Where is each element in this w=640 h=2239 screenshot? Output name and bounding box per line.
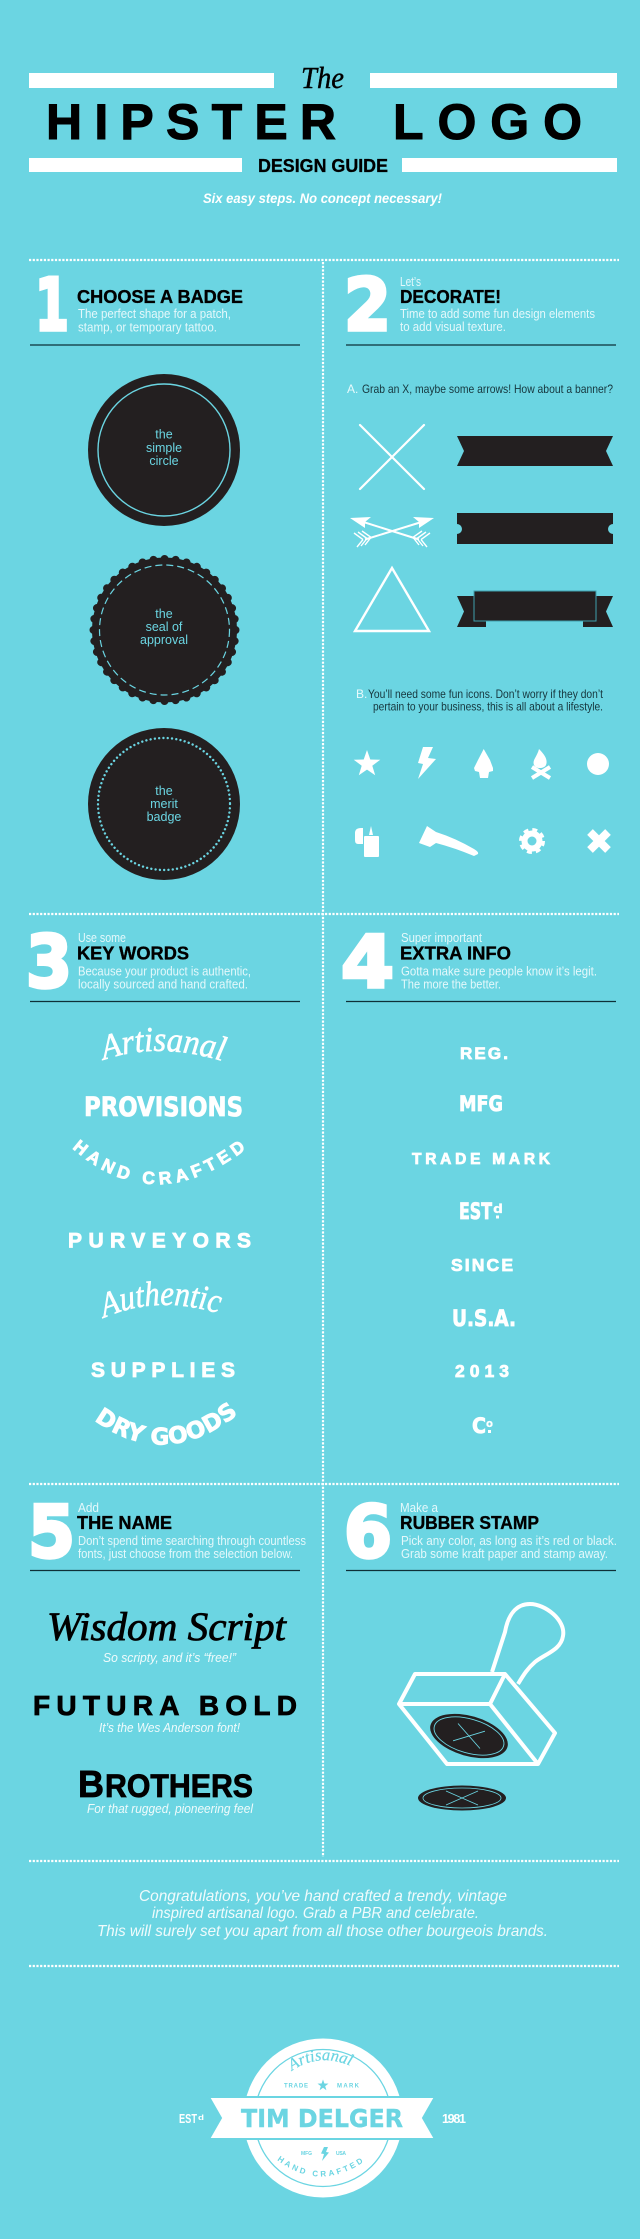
- step 4 description: [401, 964, 597, 992]
- logo circle: [244, 2038, 402, 2198]
- step 4 description: Gotta make sure people know it’s legit.: [401, 964, 597, 978]
- step 4 description: The more the better.: [401, 978, 501, 992]
- font sample: Brothers: [78, 1764, 253, 1806]
- step 2 heading: DECORATE!: [400, 287, 501, 307]
- step 3 description: Because your product is authentic,: [78, 964, 251, 978]
- title block: [29, 60, 617, 206]
- closing text: This will surely set you apart from all those other bourgeois brands.: [97, 1923, 548, 1940]
- logo: Artisanal: Artisanal: [290, 2051, 354, 2072]
- font sample: Futura Bold: FUTURA BOLD: [33, 1690, 297, 1721]
- keyword: Provisions: PROVISIONS: [84, 1092, 243, 1123]
- illustration: rubber stamp: [399, 1604, 563, 1810]
- title: The: The: [301, 60, 344, 95]
- icon: axe: [419, 826, 478, 856]
- icon: crossed arrows: [350, 517, 434, 547]
- step 6 description: Grab some kraft paper and stamp away.: [401, 1547, 608, 1561]
- instruction A: A.: [347, 382, 358, 396]
- info: USA: U.S.A.: [452, 1307, 516, 1332]
- info: Trade Mark: TRADE MARK: [412, 1151, 551, 1168]
- step number 3: 3: [26, 920, 72, 1004]
- logo: MFG USA: MFG: [301, 2151, 312, 2157]
- keyword: Authentic: Authentic: [102, 1281, 222, 1319]
- icon set: [354, 747, 609, 857]
- logo: Trade Mark: TRADE: [284, 2084, 308, 2090]
- icon: arrowhead: [474, 749, 493, 778]
- step 4 eyebrow: Super important: [401, 931, 482, 945]
- step 3 eyebrow: Use some: [78, 931, 126, 945]
- step number 1: 1: [35, 263, 69, 347]
- logo: MFG USA: [301, 2147, 346, 2161]
- caption: Futura Bold: It’s the Wes Anderson font!: [99, 1720, 240, 1735]
- step 1 heading: CHOOSE A BADGE: [77, 287, 243, 307]
- icon: gear: [520, 830, 544, 852]
- step number 4: 4: [341, 920, 394, 1004]
- instruction B: pertain to your business, this is all about a lifestyle.: [373, 700, 603, 714]
- step 6 heading: RUBBER STAMP: [400, 1513, 539, 1533]
- logo: Estd: d: [198, 2115, 204, 2122]
- tagline: Six easy steps. No concept necessary!: [203, 190, 442, 206]
- info: Since: SINCE: [451, 1255, 513, 1275]
- panel: step 3 key words: [26, 920, 300, 1446]
- step 5 heading: THE NAME: [77, 1513, 172, 1533]
- title bars: [29, 73, 617, 172]
- badge: seal of approval: approval: [140, 633, 188, 647]
- stamp face logo: [425, 1706, 513, 1766]
- logo: Tim Delger: TIM DELGER: [241, 2104, 403, 2133]
- step 1 description: [78, 307, 231, 334]
- badge: merit badge: [88, 728, 240, 880]
- step 2 eyebrow: Let’s: [400, 275, 421, 289]
- step 2 description: [400, 307, 595, 334]
- logo: Trade Mark: [284, 2080, 360, 2090]
- final logo: [179, 2038, 466, 2198]
- banner: folded ribbon: [457, 591, 613, 627]
- logo: 1981: 1981: [442, 2112, 466, 2126]
- instruction B: You’ll need some fun icons. Don’t worry if they don’t: [368, 687, 604, 701]
- panel: step 6 rubber stamp: [344, 1490, 617, 1810]
- keyword: Hand Crafted: HAND CRAFTED: [72, 1139, 244, 1185]
- icon: cross: [590, 832, 608, 850]
- stamp impression: [418, 1786, 506, 1810]
- info: Mfg: MFG: [459, 1092, 503, 1116]
- panel: step 4 extra info: [341, 920, 616, 1438]
- closing text: [97, 1888, 548, 1940]
- badge: simple circle: circle: [149, 454, 179, 468]
- badge: seal of approval: seal of: [146, 620, 183, 634]
- step 3 description: locally sourced and hand crafted.: [78, 978, 248, 992]
- step number 6: 6: [344, 1490, 392, 1574]
- keyword: Supplies: SUPPLIES: [91, 1359, 235, 1382]
- logo: Trade Mark: MARK: [337, 2084, 360, 2090]
- icon: star: [354, 750, 380, 775]
- step 6 description: Pick any color, as long as it’s red or black.: [401, 1534, 617, 1548]
- step 3 heading: KEY WORDS: [77, 944, 189, 964]
- info: Estd: EST: [459, 1200, 492, 1225]
- step 1 description: The perfect shape for a patch,: [78, 307, 231, 321]
- step 5 description: fonts, just choose from the selection below.: [78, 1547, 293, 1561]
- badge: simple circle: the: [155, 428, 173, 442]
- step 2 description: Time to add some fun design elements: [400, 307, 595, 321]
- icon: lightning bolt: [418, 747, 436, 779]
- icon: dot: [587, 753, 609, 775]
- logo: Hand Crafted: HAND CRAFTED: [278, 2156, 362, 2177]
- font sample: Brothers: ROTHERS: [105, 1768, 253, 1804]
- step 6 description: [401, 1534, 617, 1561]
- info: Reg.: REG.: [460, 1044, 508, 1063]
- panel: step 5 the name: [28, 1490, 306, 1816]
- logo: Estd: EST: [179, 2112, 197, 2126]
- step 5 description: [78, 1534, 306, 1561]
- icon: crossed lines: [360, 425, 424, 489]
- instruction B: [356, 687, 604, 714]
- badge: merit badge: merit: [150, 797, 178, 811]
- step 3 description: [78, 964, 251, 992]
- keyword: Dry Goods: DRY GOODS: [95, 1402, 236, 1446]
- keyword: Purveyors: PURVEYORS: [68, 1230, 251, 1252]
- step 2 description: to add visual texture.: [400, 320, 506, 334]
- icon: campfire: [532, 749, 550, 778]
- closing text: inspired artisanal logo. Grab a PBR and celebrate.: [152, 1905, 479, 1922]
- banner: swallowtail: [457, 436, 613, 466]
- logo banner: [209, 2097, 435, 2139]
- step 5 description: Don’t spend time searching through countless: [78, 1534, 306, 1548]
- title: Hipster Logo: LOGO: [393, 94, 582, 150]
- step number 2: 2: [344, 263, 391, 347]
- logo: MFG USA: USA: [336, 2151, 346, 2157]
- icon: triangle: [355, 568, 429, 631]
- icon: lighter: [355, 826, 379, 857]
- info: Estd: d: [493, 1202, 503, 1216]
- step 6 eyebrow: Make a: [400, 1501, 438, 1515]
- step 5 eyebrow: Add: [78, 1501, 99, 1515]
- title: Hipster Logo: HIPSTER: [46, 94, 336, 150]
- banner: ticket: [457, 513, 613, 544]
- step number 5: 5: [28, 1490, 75, 1574]
- badge: seal of approval: the: [155, 607, 173, 621]
- keyword: Artisanal: Artisanal: [102, 1028, 228, 1061]
- panel: step 1 choose a badge: [30, 263, 300, 880]
- badge: seal of approval: [92, 558, 237, 702]
- font sample: Brothers: B: [78, 1764, 104, 1806]
- instruction B: B.: [356, 687, 367, 701]
- badge: simple circle: [88, 374, 240, 526]
- title: Hipster Logo: [46, 94, 582, 150]
- caption: Brothers: For that rugged, pioneering feel: [87, 1801, 254, 1816]
- badge: merit badge: badge: [147, 810, 181, 824]
- badge: merit badge: the: [155, 784, 173, 798]
- panel: step 2 decorate: [344, 263, 616, 857]
- info: 2013: 2013: [455, 1361, 509, 1381]
- closing text: Congratulations, you’ve hand crafted a trendy, vintage: [139, 1888, 507, 1905]
- badge: simple circle: simple: [146, 441, 182, 455]
- caption: Wisdom Script: So scripty, and it’s “free!”: [103, 1650, 237, 1665]
- subtitle: Design Guide: DESIGN GUIDE: [258, 156, 388, 176]
- step 4 heading: EXTRA INFO: [400, 944, 511, 964]
- info: Co: o: [486, 1417, 493, 1430]
- font sample: Wisdom Script: Wisdom Script: [47, 1604, 287, 1649]
- info: Co: C: [472, 1414, 486, 1438]
- step 1 description: stamp, or temporary tattoo.: [78, 320, 217, 334]
